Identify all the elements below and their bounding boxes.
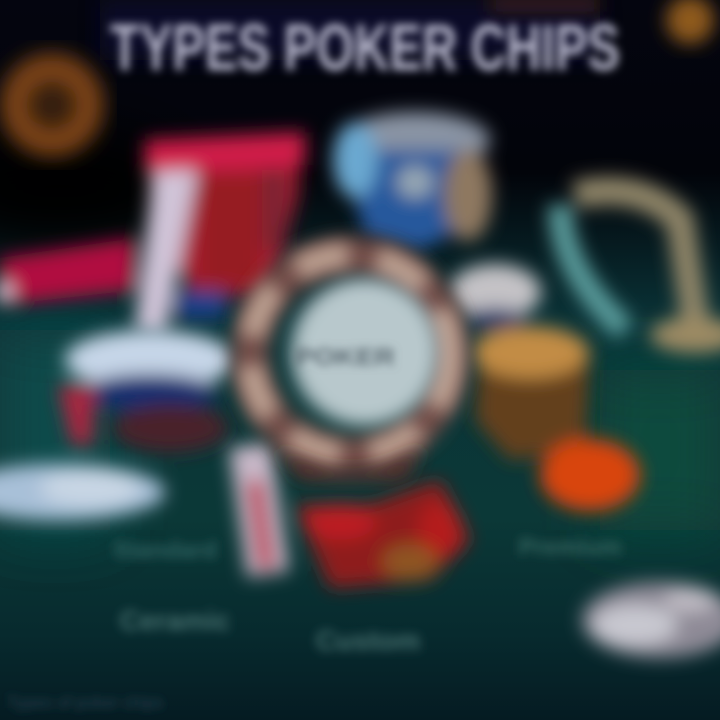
icon: orange chip top left	[16, 69, 88, 141]
chip label: POKER	[295, 344, 395, 371]
chip face	[291, 278, 439, 426]
red and white chip stack bottom	[229, 442, 470, 588]
blue chip stack	[333, 112, 492, 250]
label: right: Premium	[519, 534, 621, 561]
blue and white chip stack left	[0, 330, 235, 520]
center chip	[250, 255, 450, 480]
label: left: Standard	[113, 537, 217, 564]
red chip stack	[0, 132, 305, 335]
white chips bottom right	[582, 582, 720, 658]
chip red base	[275, 445, 425, 480]
label: lower left: Ceramic	[120, 605, 230, 636]
orange chip stack	[449, 264, 640, 511]
chip rim	[250, 255, 450, 455]
label: lower center: Custom	[316, 625, 420, 656]
footer text: Types of poker chips	[7, 693, 163, 712]
icon: orange chip top right	[490, 0, 714, 44]
green chip ring right	[560, 191, 720, 353]
chip rim highlights	[250, 255, 450, 455]
